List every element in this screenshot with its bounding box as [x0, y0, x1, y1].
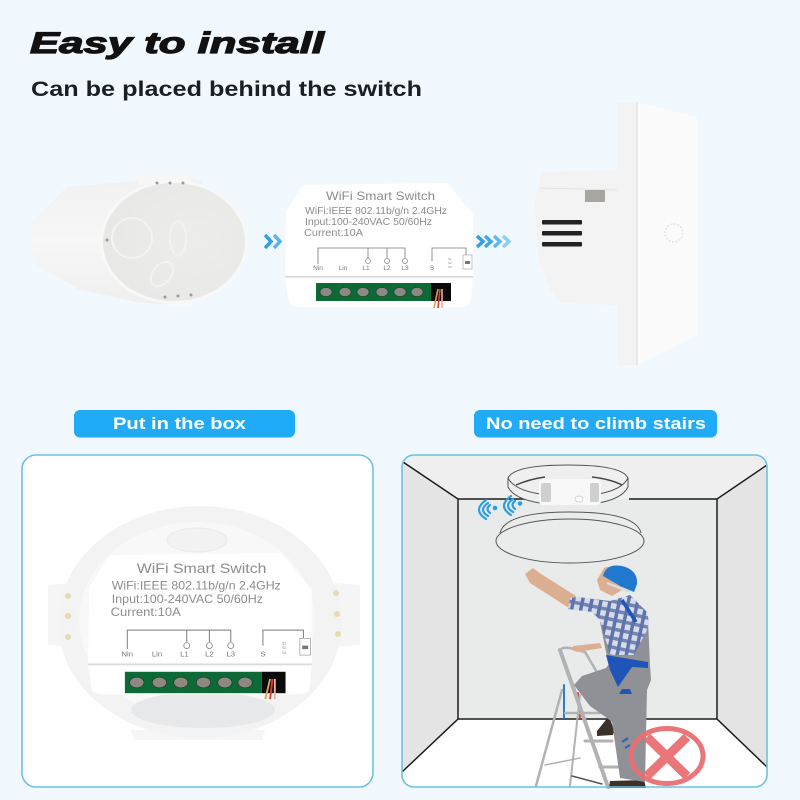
panel: box installation photo — [22, 455, 373, 787]
product: WiFi smart switch module: S — [430, 265, 435, 272]
product: WiFi smart switch module: Lin — [339, 265, 348, 272]
arrow: right chevrons — [477, 236, 509, 247]
switch module in box: S3 — [282, 651, 286, 655]
room panel border — [402, 455, 767, 787]
arrow: left chevrons — [265, 235, 280, 248]
switch module in box: L1 — [180, 649, 189, 658]
panel: room with ceiling lamp and worker — [402, 455, 767, 788]
label: No need to climb stairs — [474, 410, 717, 438]
junction box front view — [48, 506, 360, 740]
stepladder — [536, 648, 625, 787]
label: Put in the box — [74, 410, 295, 438]
product: WiFi smart switch module: S1 — [448, 257, 452, 261]
label: Put in the box: Put in the box — [113, 415, 247, 433]
product: WiFi smart switch module: L1 — [362, 265, 370, 272]
product: WiFi smart switch module: S2 — [448, 261, 452, 265]
switch module in box: WiFi:IEEE 802.11b/g/n 2.4GHz — [112, 579, 281, 593]
switch module in box: Lin — [152, 649, 162, 658]
switch module in box: S2 — [282, 646, 286, 650]
icon: red prohibition cross — [631, 728, 703, 784]
subtitle: Can be placed behind the switch — [31, 78, 422, 101]
product: WiFi smart switch module: L2 — [383, 265, 391, 272]
worker on ladder — [525, 565, 651, 788]
switch module in box: Current:10A — [111, 605, 181, 619]
switch module in box: Nin — [121, 649, 133, 658]
product: WiFi smart switch module: L3 — [401, 265, 409, 272]
product: WiFi smart switch module: Input:100-240VAC 50/60Hz — [305, 217, 432, 228]
title: Easy to install — [30, 27, 325, 60]
label: No need to climb stairs: No need to climb stairs — [486, 415, 706, 433]
product: WiFi smart switch module: S3 — [448, 265, 452, 269]
product: WiFi smart switch module: Nin — [313, 265, 323, 272]
switch module in box: Input:100-240VAC 50/60Hz — [112, 592, 263, 606]
switch module in box: S1 — [282, 641, 286, 645]
switch module in box: L3 — [227, 649, 235, 658]
ceiling lamp — [496, 465, 644, 563]
switch module in box — [88, 553, 312, 699]
product: wall switch side view — [535, 102, 697, 365]
icon: wifi signal — [479, 496, 521, 519]
product: WiFi smart switch module: Current:10A — [304, 228, 363, 239]
product: WiFi smart switch module — [285, 183, 473, 308]
product: WiFi smart switch module: WiFi:IEEE 802.11b/g/n 2.4GHz — [305, 206, 447, 217]
switch module in box: S — [260, 649, 266, 658]
junction box product image — [32, 173, 248, 306]
switch module in box: L2 — [205, 649, 214, 658]
product: WiFi smart switch module: WiFi Smart Switch — [326, 189, 435, 203]
switch module in box: WiFi Smart Switch — [137, 561, 266, 577]
